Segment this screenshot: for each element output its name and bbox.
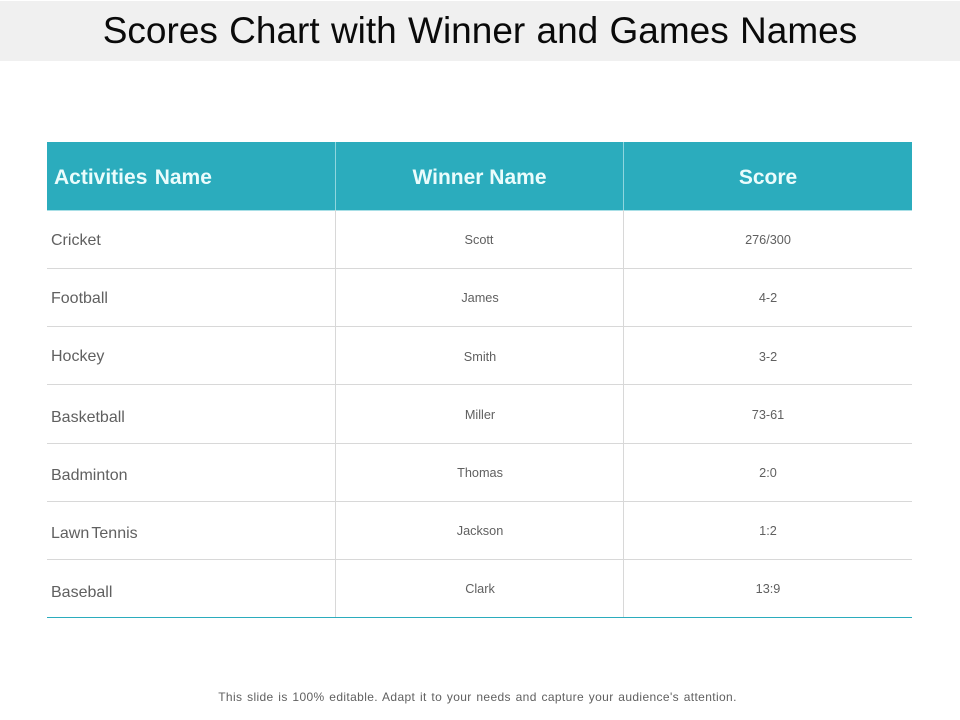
row: hockey: [51, 348, 777, 365]
row: badminton: Thomas: [457, 466, 503, 480]
title: Scores Chart with Winner and Games Names: [103, 10, 857, 51]
row: cricket: [51, 232, 791, 249]
table header: [47, 142, 912, 210]
row: hockey: Hockey: [51, 348, 104, 365]
row: lawn tennis: Jackson: [457, 524, 503, 538]
row: baseball: Baseball: [51, 584, 112, 601]
row: badminton: Badminton: [51, 467, 128, 484]
row: baseball: 13:9: [756, 582, 780, 596]
row: hockey: Smith: [464, 350, 496, 364]
header: winner name: Winner Name: [412, 166, 546, 189]
footer note: This slide is 100% editable. Adapt it to your needs and capture your audience's attention.: [218, 690, 737, 704]
row: baseball: [51, 582, 780, 601]
header: score: Score: [739, 166, 797, 189]
row: cricket: Cricket: [51, 232, 101, 249]
row: lawn tennis: 1:2: [759, 524, 777, 538]
row: hockey: 3-2: [759, 350, 777, 364]
row: baseball: Clark: [465, 582, 495, 596]
row: football: James: [461, 291, 499, 305]
row: football: 4-2: [759, 291, 777, 305]
row: cricket: Scott: [465, 233, 493, 247]
row: badminton: 2:0: [759, 466, 777, 480]
row: basketball: [51, 408, 784, 426]
row: cricket: 276/300: [745, 233, 791, 247]
row: basketball: Miller: [465, 408, 495, 422]
row: lawn tennis: Lawn Tennis: [51, 525, 138, 542]
row: basketball: Basketball: [51, 409, 125, 426]
row: lawn tennis: [51, 524, 777, 542]
row: football: [51, 290, 777, 307]
title bar: [0, 1, 960, 61]
header: activities name: Activities Name: [54, 166, 212, 189]
row: basketball: 73-61: [752, 408, 784, 422]
row: football: Football: [51, 290, 108, 307]
row: badminton: [51, 466, 777, 484]
